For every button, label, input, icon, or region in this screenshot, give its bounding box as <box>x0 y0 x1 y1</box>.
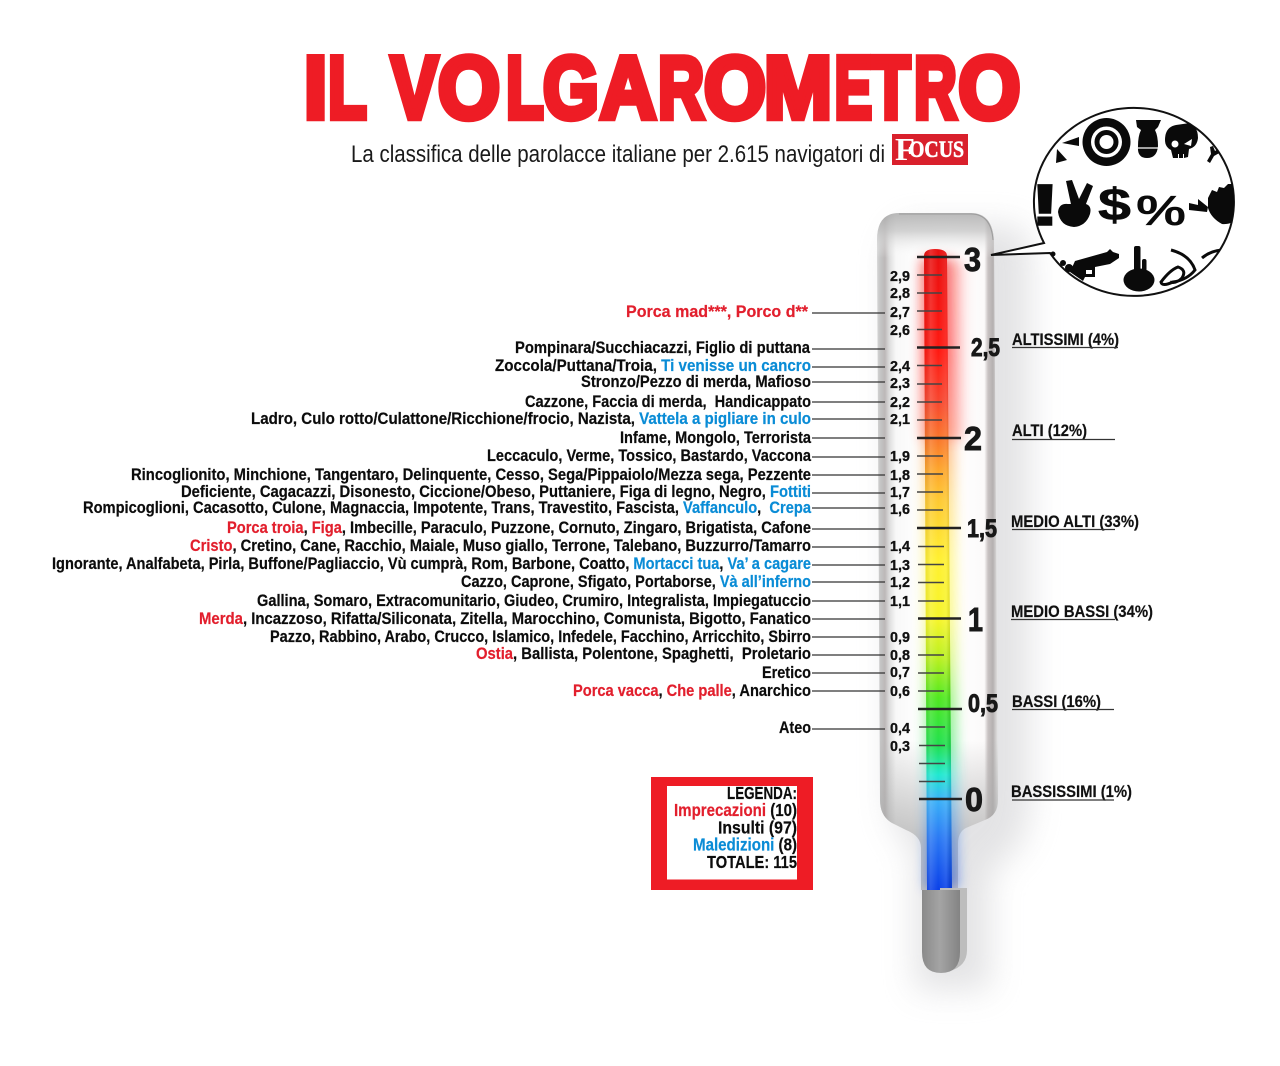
minor scale numbers: 2,9 <box>890 268 910 285</box>
major scale numbers: 2,5 <box>971 334 1000 362</box>
minor scale numbers: 2,1 <box>890 411 910 428</box>
row 1,8: Rincoglionito, Minchione, Tangentaro, Delinquente, Cesso, Sega/Pippaiolo/Mezza sega, Pezzente <box>131 466 811 484</box>
row 1,2: Cazzo, Caprone, Sfigato, Portaborse, Và all’inferno <box>461 573 811 591</box>
legend: LEGENDA: <box>727 783 797 803</box>
minor scale numbers: 2,2 <box>890 394 910 411</box>
minor scale numbers: 1,2 <box>890 574 910 591</box>
icon: exclamation mark: ! <box>1030 173 1060 238</box>
row 2: Infame, Mongolo, Terrorista <box>620 429 812 447</box>
minor scale numbers: 2,8 <box>890 285 910 302</box>
thermometer <box>877 213 998 973</box>
category: medio bassi: MEDIO BASSI (34%) <box>1011 603 1153 621</box>
row 2,7: Porca mad***, Porco d** <box>626 303 809 321</box>
row 0,4: Ateo <box>779 719 811 737</box>
category: bassissimi: BASSISSIMI (1%) <box>1011 783 1132 801</box>
legend: TOTALE: 115 <box>707 852 797 872</box>
fluid column <box>924 249 952 890</box>
row 0,4 <box>779 719 885 737</box>
major scale numbers: 0 <box>965 781 983 818</box>
title: O <box>438 38 500 137</box>
title: T <box>872 38 910 137</box>
category: altissimi: ALTISSIMI (4%) <box>1012 331 1119 349</box>
title: A <box>600 38 656 137</box>
row 2,4: Zoccola/Puttana/Troia, Ti venisse un cancro <box>495 357 811 375</box>
logo: Focus: F <box>895 131 915 167</box>
minor scale numbers: 1,7 <box>890 484 910 501</box>
title: L <box>328 38 366 137</box>
row 1,4: Cristo, Cretino, Cane, Racchio, Maiale, Muso giallo, Terrone, Talebano, Buzzurro/Tamarro <box>190 537 811 555</box>
major scale numbers <box>964 241 1000 818</box>
icon: skull <box>1165 123 1198 158</box>
category labels <box>1011 331 1153 801</box>
icon: peace hand <box>1058 180 1093 227</box>
minor scale numbers: 0,6 <box>890 683 910 700</box>
title: O <box>704 38 766 137</box>
row 1,7: Deficiente, Cagacazzi, Disonesto, Ciccione/Obeso, Puttaniere, Figa di legno, Negro, Fottiti <box>181 483 811 501</box>
minor scale numbers: 1,4 <box>890 538 911 555</box>
logo: Focus: OCUS <box>909 137 964 162</box>
row 2,1: Ladro, Culo rotto/Culattone/Ricchione/frocio, Nazista, Vattela a pigliare in culo <box>251 410 811 428</box>
legend: Maledizioni (8) <box>693 834 797 854</box>
row 0,9: Pazzo, Rabbino, Arabo, Crucco, Islamico, Infedele, Facchino, Arricchito, Sbirro <box>270 628 811 646</box>
minor scale numbers: 1,1 <box>890 593 910 610</box>
row 2,2: Cazzone, Faccia di merda, Handicappato <box>525 393 811 411</box>
legend <box>651 777 813 890</box>
subtitle: La classifica delle parolacce italiane per 2.615 navigatori di <box>351 141 885 168</box>
row 0,8: Ostia, Ballista, Polentone, Spaghetti, Proletario <box>476 645 811 663</box>
icon: squiggle <box>1161 250 1195 284</box>
minor scale numbers: 1,8 <box>890 467 910 484</box>
row 1,1: Gallina, Somaro, Extracomunitario, Giudeo, Crumiro, Integralista, Impiegatuccio <box>257 592 811 610</box>
row 1,3: Ignorante, Analfabeta, Pirla, Buffone/Pagliaccio, Vù cumprà, Rom, Barbone, Coatto, Mortacci tua, Va’ a cagare <box>52 555 811 573</box>
icon: dollar: $ <box>1098 179 1131 230</box>
glass body <box>877 213 998 890</box>
icon: lightning <box>1189 199 1208 212</box>
category: medio alti: MEDIO ALTI (33%) <box>1011 513 1139 531</box>
minor scale numbers: 0,8 <box>890 647 910 664</box>
row 0,6: Porca vacca, Che palle, Anarchico <box>573 682 811 700</box>
thermometer shadow <box>890 225 1030 990</box>
speech bubble <box>991 108 1238 296</box>
major scale numbers: 2 <box>964 420 982 457</box>
logo: Focus <box>892 131 968 167</box>
minor scale numbers: 0,3 <box>890 738 910 755</box>
title: R <box>658 38 704 137</box>
minor scale numbers: 2,6 <box>890 322 910 339</box>
row 2,3: Stronzo/Pezzo di merda, Mafioso <box>581 373 811 391</box>
title: R <box>914 38 957 137</box>
major scale numbers: 3 <box>964 241 981 278</box>
title: I <box>304 38 327 137</box>
icon: bomb <box>1136 120 1161 158</box>
icon: target <box>1082 118 1130 166</box>
minor scale numbers: 0,7 <box>890 664 910 681</box>
major scale numbers: 1 <box>968 601 983 638</box>
row 1: Merda, Incazzoso, Rifatta/Siliconata, Zitella, Marocchino, Comunista, Bigotto, Fanatico <box>199 610 811 628</box>
title: M <box>764 38 832 137</box>
title: E <box>834 38 872 137</box>
major scale numbers: 1,5 <box>967 515 997 543</box>
word list with leader lines <box>52 303 885 737</box>
row 0,7 <box>762 664 885 682</box>
title: O <box>958 38 1020 137</box>
category: bassi: BASSI (16%) <box>1012 693 1101 711</box>
minor scale numbers: 2,3 <box>890 375 910 392</box>
icon: scribble marks <box>1051 252 1073 272</box>
minor scale numbers: 1,3 <box>890 557 910 574</box>
icon: triangles <box>1056 137 1079 163</box>
major scale numbers: 0,5 <box>968 690 998 718</box>
minor scale numbers: 2,4 <box>890 358 911 375</box>
minor scale numbers: 1,9 <box>890 448 910 465</box>
metal bulb <box>922 888 967 973</box>
icon: percent: % <box>1136 187 1186 235</box>
row 1,9: Leccaculo, Verme, Tossico, Bastardo, Vaccona <box>487 447 812 465</box>
icon: arc <box>1202 250 1222 258</box>
row 0,7: Eretico <box>762 664 811 682</box>
title: G <box>543 38 599 137</box>
row 2,5: Pompinara/Succhiacazzi, Figlio di puttana <box>515 339 811 357</box>
row 1,5: Porca troia, Figa, Imbecille, Paraculo, Puzzone, Cornuto, Zingaro, Brigatista, Cafone <box>227 519 811 537</box>
minor scale numbers <box>890 268 911 755</box>
coloured glow <box>920 258 964 888</box>
minor scale numbers: 0,9 <box>890 629 910 646</box>
icon: pistol <box>1070 249 1119 281</box>
row 1,6: Rompicoglioni, Cacasotto, Culone, Magnaccia, Impotente, Trans, Travestito, Fascista, Vaffanculo, Crepa <box>83 499 812 517</box>
minor scale numbers: 0,4 <box>890 720 911 737</box>
icon: middle finger <box>1124 246 1154 292</box>
icon: small shape <box>1207 146 1218 163</box>
title: V <box>391 38 438 137</box>
icon: fist <box>1208 184 1233 224</box>
scale ticks <box>917 257 962 799</box>
category: alti: ALTI (12%) <box>1012 422 1087 440</box>
title: L <box>506 38 544 137</box>
legend: Insulti (97) <box>718 818 797 838</box>
legend: Imprecazioni (10) <box>674 800 797 820</box>
minor scale numbers: 1,6 <box>890 501 910 518</box>
minor scale numbers: 2,7 <box>890 304 910 321</box>
